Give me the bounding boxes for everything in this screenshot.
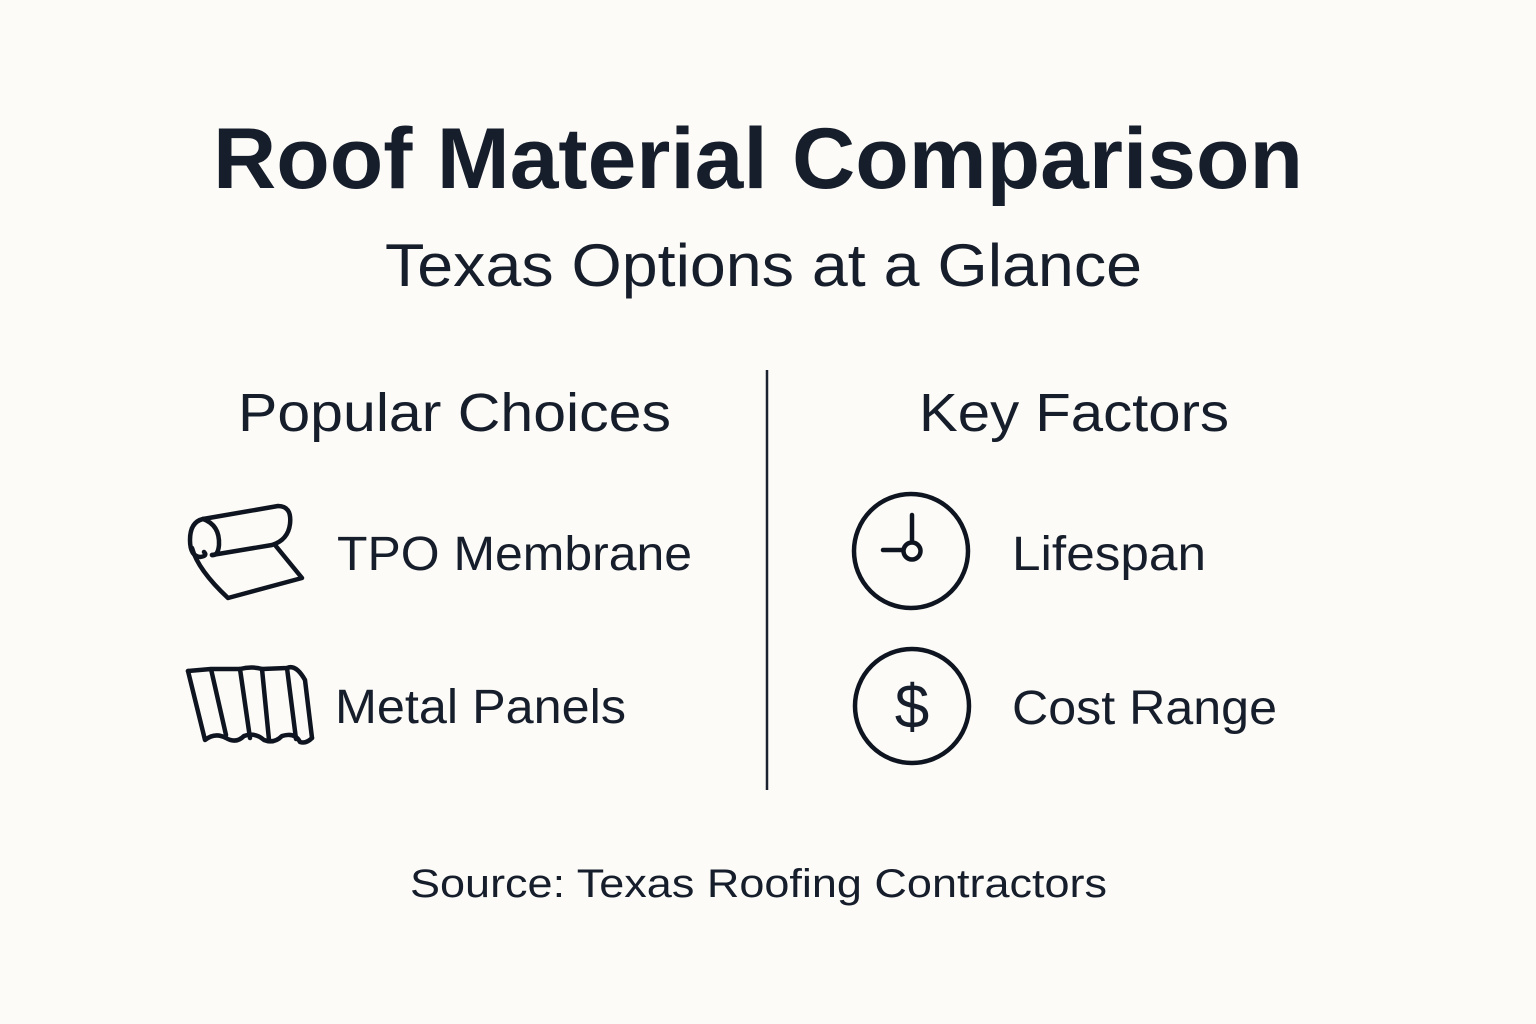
icon: metal panels (188, 667, 312, 742)
label: Cost Range: Cost Range (1012, 682, 1277, 735)
icon: TPO roll (190, 506, 302, 598)
source: Source: Texas Roofing Contractors (410, 862, 1107, 906)
label: Metal Panels: Metal Panels (335, 681, 626, 734)
label: Lifespan: Lifespan (1012, 528, 1206, 581)
icon: clock (854, 494, 968, 608)
label: TPO Membrane: TPO Membrane (337, 528, 692, 581)
icon: dollar (855, 649, 969, 763)
heading: key factors: Key Factors (919, 383, 1229, 443)
panel: popular choices (188, 383, 692, 742)
divider (766, 370, 768, 790)
icon: dollar: $ (895, 673, 929, 742)
subtitle: Texas Options at a Glance (385, 232, 1142, 299)
title: Roof Material Comparison (213, 111, 1303, 207)
panel: key factors (854, 383, 1277, 763)
heading: popular choices: Popular Choices (238, 383, 671, 443)
